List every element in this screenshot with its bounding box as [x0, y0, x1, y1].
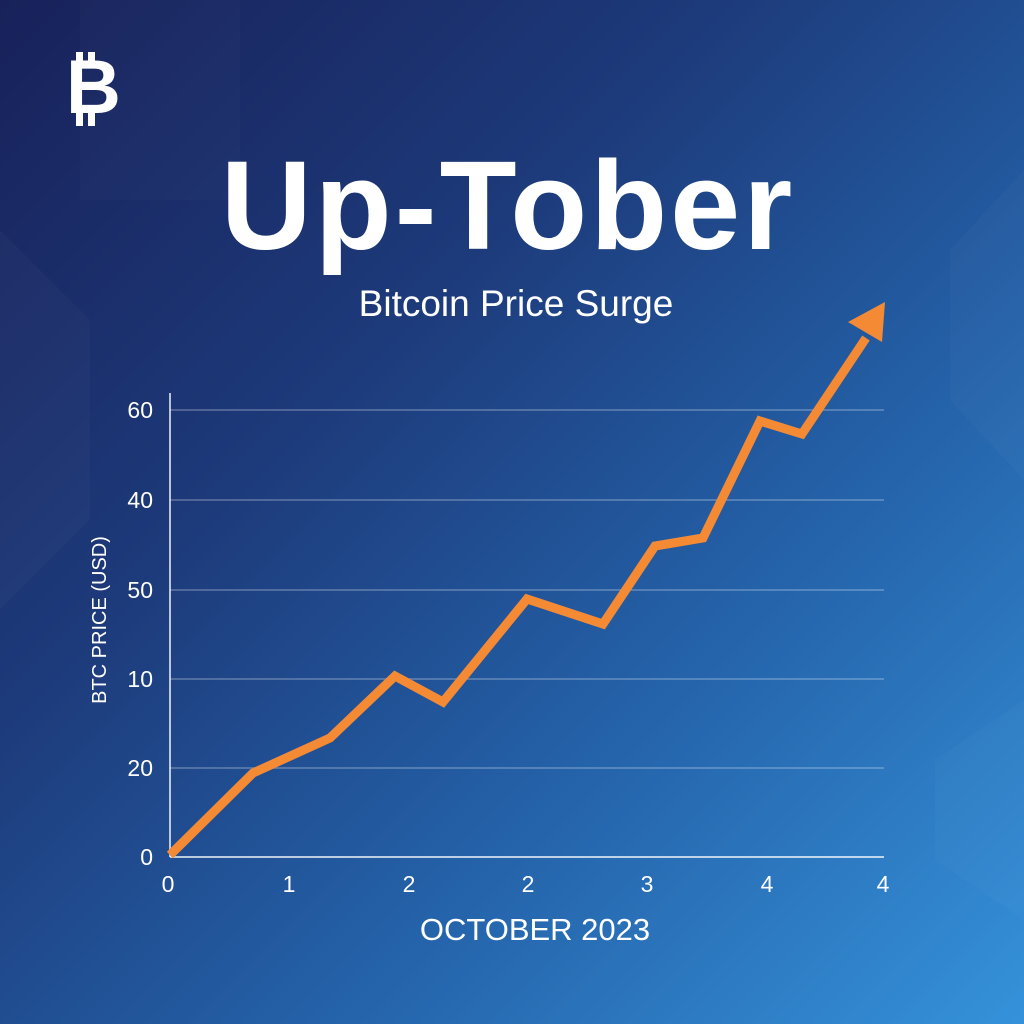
x-axis labels: 3	[641, 871, 653, 897]
x-axis labels: 4	[877, 871, 890, 897]
y-axis labels	[127, 397, 153, 870]
price line with arrow	[170, 302, 885, 855]
x-axis labels: 2	[403, 871, 415, 897]
x-axis labels: 2	[522, 871, 534, 897]
y-axis labels: 0	[140, 844, 153, 870]
y-axis labels: 20	[127, 755, 153, 781]
y-axis labels: 40	[127, 487, 153, 513]
x-axis labels: 1	[283, 871, 295, 897]
y-axis labels: 10	[127, 666, 153, 692]
icon: bitcoin logo: B	[66, 45, 121, 130]
y-axis labels: 60	[127, 397, 153, 423]
x-axis labels: 4	[761, 871, 774, 897]
y-axis labels: 50	[127, 577, 153, 603]
x-axis labels	[162, 871, 890, 897]
y-axis title: BTC PRICE (USD)	[89, 536, 111, 704]
subtitle: Bitcoin Price Surge	[359, 283, 673, 324]
x-axis labels: 0	[162, 871, 174, 897]
title: Up-Tober	[221, 135, 795, 276]
x-axis title: OCTOBER 2023	[420, 912, 650, 947]
